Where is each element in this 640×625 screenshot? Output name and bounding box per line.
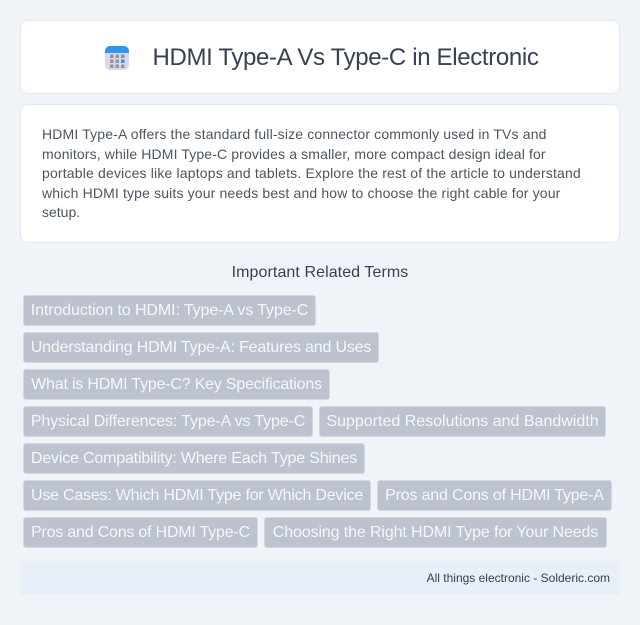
tag list: Pros and Cons of HDMI Type-A <box>385 487 604 504</box>
text block: summary: setup. <box>42 204 80 220</box>
text block: summary: which HDMI type suits your needs best and how to choose the right cable for your <box>42 184 560 200</box>
text block: summary: portable devices like laptops and tablets. Explore the rest of the article to understand <box>42 165 581 181</box>
icon: calendar <box>105 46 129 70</box>
tag list: Introduction to HDMI: Type-A vs Type-C <box>31 302 308 319</box>
tag list: Pros and Cons of HDMI Type-C <box>31 524 250 541</box>
tag list: Choosing the Right HDMI Type for Your Needs <box>273 524 598 541</box>
footer <box>20 561 620 595</box>
tag list: Supported Resolutions and Bandwidth <box>326 413 599 430</box>
tag list: What is HDMI Type-C? Key Specifications <box>31 376 322 393</box>
tag list: Use Cases: Which HDMI Type for Which Device <box>31 487 363 504</box>
footer: All things electronic - Solderic.com <box>427 571 610 585</box>
panel: summary <box>20 104 620 243</box>
text block: summary: monitors, while HDMI Type-C provides a smaller, more compact design ideal for <box>42 146 546 162</box>
panel: header <box>20 20 620 94</box>
heading: related terms: Important Related Terms <box>232 264 408 281</box>
text block: summary <box>42 126 581 220</box>
tag list: Understanding HDMI Type-A: Features and Uses <box>31 339 371 356</box>
tag list: Device Compatibility: Where Each Type Shines <box>31 450 357 467</box>
text block: summary: HDMI Type-A offers the standard full-size connector commonly used in TVs and <box>42 126 547 142</box>
tag list <box>23 295 612 548</box>
title: HDMI Type-A Vs Type-C in Electronic <box>152 44 539 71</box>
tag list: Physical Differences: Type-A vs Type-C <box>31 413 305 430</box>
